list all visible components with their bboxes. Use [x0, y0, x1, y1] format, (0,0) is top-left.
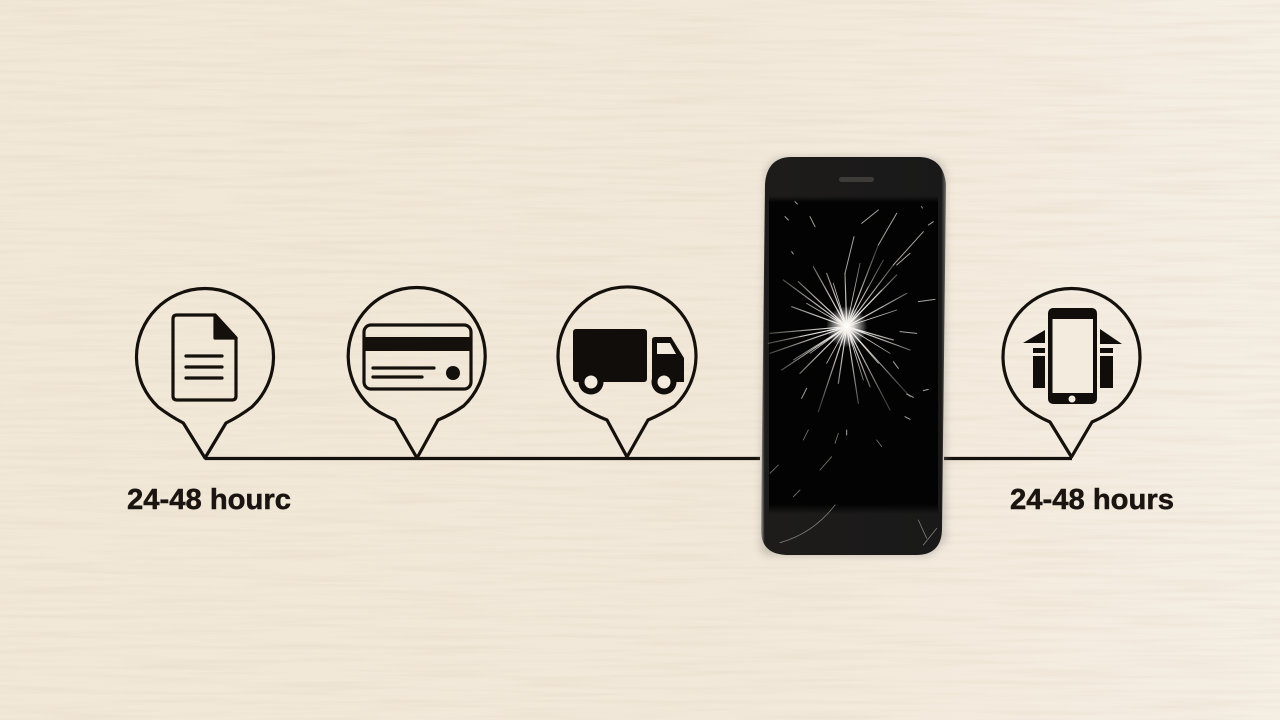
icon: document [173, 315, 236, 400]
pin: document [136, 288, 274, 458]
pin: delivery truck [558, 287, 696, 457]
smartphone with cracked screen [760, 157, 946, 556]
label: right time estimate: 24-48 hours [1010, 484, 1174, 516]
icon: credit card [364, 325, 471, 389]
icon: phone with arrows [1023, 308, 1122, 404]
phone screen [769, 196, 938, 514]
pin: credit card [348, 287, 485, 458]
pin: phone replacement [1003, 288, 1140, 457]
screen crack starburst [768, 202, 937, 545]
icon: delivery truck [573, 329, 684, 394]
phone speaker [839, 177, 874, 182]
label: left time estimate: 24-48 hourc [127, 484, 291, 516]
timeline connector line [205, 457, 1072, 460]
